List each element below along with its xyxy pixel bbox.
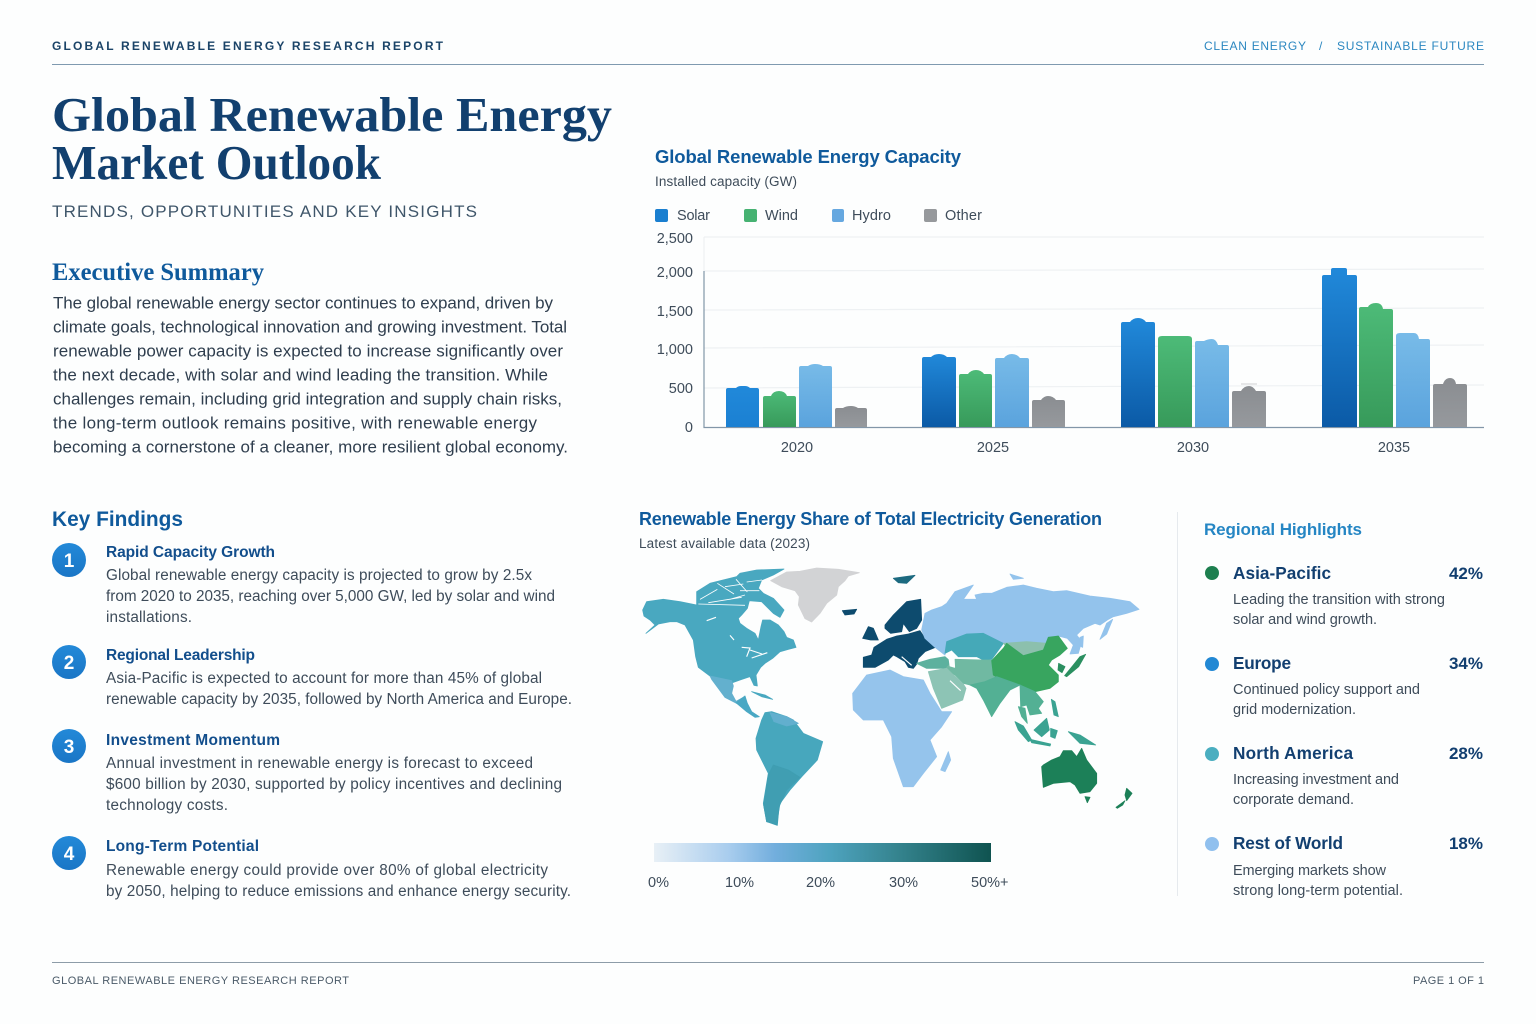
australia and new zealand xyxy=(1042,748,1132,808)
footer: GLOBAL RENEWABLE ENERGY RESEARCH REPORT xyxy=(52,975,349,987)
header bar xyxy=(52,39,1484,65)
finding 3: $600 billion by 2030, supported by policy incentives and declining xyxy=(106,776,562,793)
region: rest of world: Rest of World xyxy=(1233,833,1343,853)
finding 1: 1 xyxy=(64,551,75,572)
y axis labels: 2,000 xyxy=(657,265,693,281)
x axis labels xyxy=(781,440,1410,456)
china xyxy=(992,636,1067,692)
text block: summary body xyxy=(53,294,568,456)
colour scale legend: 10% xyxy=(725,875,754,891)
title: Global Renewable Energy xyxy=(52,87,612,142)
finding 4: by 2050, helping to reduce emissions and enhance energy security. xyxy=(106,883,571,900)
footer xyxy=(52,962,1484,987)
turkey and caucasus xyxy=(917,657,951,668)
chart legend: Solar xyxy=(677,208,710,224)
x axis labels: 2020 xyxy=(781,440,813,456)
finding 2: 2 xyxy=(64,653,74,674)
north america xyxy=(643,569,796,699)
header bar: SUSTAINABLE FUTURE xyxy=(1337,39,1484,53)
text block: summary body: the next decade, with solar and wind leading the transition. While xyxy=(53,366,548,384)
x axis labels: 2025 xyxy=(977,440,1009,456)
bars 2035 xyxy=(1322,268,1467,427)
heading: capacity chart: Global Renewable Energy Capacity xyxy=(655,146,962,167)
panel: capacity chart xyxy=(655,146,1484,456)
x axis labels: 2035 xyxy=(1378,440,1410,456)
chart legend: Wind xyxy=(765,208,798,224)
india and south east asia xyxy=(970,677,1043,723)
title xyxy=(52,87,612,190)
text block: summary body: becoming a cornerstone of a cleaner, more resilient global economy. xyxy=(53,438,568,456)
finding 3 xyxy=(52,729,562,814)
text block: summary body: climate goals, technological innovation and growing investment. Total xyxy=(53,318,567,336)
water details xyxy=(707,617,961,691)
finding 3: Investment Momentum xyxy=(106,732,280,749)
region: asia-pacific xyxy=(1205,563,1483,628)
finding 4: 4 xyxy=(64,844,75,865)
africa xyxy=(853,670,952,787)
y axis labels xyxy=(657,231,693,436)
region: europe: Continued policy support and xyxy=(1233,682,1420,698)
finding 4 xyxy=(52,836,571,900)
region: rest of world xyxy=(1205,833,1483,899)
header bar: GLOBAL RENEWABLE ENERGY RESEARCH REPORT xyxy=(52,39,444,53)
europe xyxy=(842,599,935,668)
header bar: CLEAN ENERGY xyxy=(1204,39,1306,53)
panel: regional highlights xyxy=(1204,520,1483,899)
y axis labels: 0 xyxy=(685,420,693,436)
finding 1: from 2020 to 2035, reaching over 5,000 GW, led by solar and wind xyxy=(106,588,555,605)
region: asia-pacific: solar and wind growth. xyxy=(1233,612,1377,628)
region: rest of world: strong long-term potential. xyxy=(1233,883,1403,899)
region: rest of world: 18% xyxy=(1449,834,1483,853)
finding 1: Global renewable energy capacity is projected to grow by 2.5x xyxy=(106,567,532,584)
finding 2: Asia-Pacific is expected to account for more than 45% of global xyxy=(106,670,542,687)
heading: map: Renewable Energy Share of Total Electricity Generation xyxy=(639,509,1102,529)
panel: executive summary xyxy=(52,259,568,456)
region: rest of world: Emerging markets show xyxy=(1233,863,1387,879)
subtitle: TRENDS, OPPORTUNITIES AND KEY INSIGHTS xyxy=(52,202,477,221)
iran and central south asia xyxy=(947,659,997,685)
finding 1: installations. xyxy=(106,609,192,626)
finding 1: Rapid Capacity Growth xyxy=(106,544,275,561)
region: europe: Europe xyxy=(1233,653,1291,673)
text block: summary body: renewable power capacity is expected to increase significantly over xyxy=(53,342,563,360)
region: asia-pacific: Asia-Pacific xyxy=(1233,563,1331,583)
panel: key findings xyxy=(52,507,572,900)
heading: key findings: Key Findings xyxy=(52,507,183,531)
heading: executive summary: Executive Summary xyxy=(52,259,264,286)
colour scale legend: 30% xyxy=(889,875,918,891)
finding 3: technology costs. xyxy=(106,797,228,814)
mongolia xyxy=(1003,642,1047,657)
russia xyxy=(922,574,1139,655)
region: north america: Increasing investment and xyxy=(1233,772,1399,788)
finding 2: renewable capacity by 2035, followed by North America and Europe. xyxy=(106,691,572,708)
region: asia-pacific: 42% xyxy=(1449,564,1483,583)
region: north america: 28% xyxy=(1449,744,1483,763)
world map xyxy=(643,568,1139,825)
text block: summary body: challenges remain, including grid integration and supply chain risks, xyxy=(53,390,562,408)
mexico and central america xyxy=(710,676,743,706)
colour scale legend xyxy=(648,843,1008,891)
region: north america: North America xyxy=(1233,743,1353,763)
chart subtitle: Installed capacity (GW) xyxy=(655,174,797,189)
title: Market Outlook xyxy=(52,135,382,190)
finding 3: 3 xyxy=(64,737,74,758)
y axis labels: 1,000 xyxy=(657,342,693,358)
finding 1 xyxy=(52,543,555,626)
bars 2025 xyxy=(922,354,1065,427)
bars 2020 xyxy=(726,364,867,427)
x axis labels: 2030 xyxy=(1177,440,1209,456)
text block: summary body: The global renewable energy sector continues to expand, driven by xyxy=(53,294,554,312)
central asia xyxy=(945,633,1003,660)
greenland xyxy=(771,568,859,622)
middle east xyxy=(928,668,966,708)
region: asia-pacific: Leading the transition with strong xyxy=(1233,592,1445,608)
text block: summary body: the long-term outlook remains positive, with renewable energy xyxy=(53,414,538,432)
header bar: / xyxy=(1319,39,1323,53)
indonesia and pacific islands xyxy=(1015,699,1096,746)
finding 3: Annual investment in renewable energy is forecast to exceed xyxy=(106,755,533,772)
footer: PAGE 1 OF 1 xyxy=(1413,975,1484,987)
arctic channels xyxy=(698,579,762,605)
finding 4: Renewable energy could provide over 80% of global electricity xyxy=(106,862,548,879)
region: europe: 34% xyxy=(1449,654,1483,673)
region: europe: grid modernization. xyxy=(1233,702,1356,718)
region: europe xyxy=(1205,653,1483,718)
heading: regional highlights: Regional Highlights xyxy=(1204,520,1362,539)
colour scale legend: 0% xyxy=(648,875,669,891)
y axis labels: 2,500 xyxy=(657,231,693,247)
japan and korea xyxy=(1058,654,1086,677)
bars 2030 xyxy=(1121,318,1266,427)
colour scale legend: 20% xyxy=(806,875,835,891)
colour scale legend: 50%+ xyxy=(971,875,1008,891)
chart legend: Hydro xyxy=(852,208,891,224)
region: north america: corporate demand. xyxy=(1233,792,1354,808)
map subtitle: Latest available data (2023) xyxy=(639,536,810,551)
chart legend: Other xyxy=(945,208,982,224)
finding 2 xyxy=(52,645,572,708)
chart legend xyxy=(655,208,982,224)
south america xyxy=(756,712,823,824)
region: north america xyxy=(1205,743,1483,808)
y axis labels: 1,500 xyxy=(657,304,693,320)
y axis labels: 500 xyxy=(669,381,693,397)
panel: world map section xyxy=(639,509,1139,891)
finding 2: Regional Leadership xyxy=(106,647,255,664)
finding 4: Long-Term Potential xyxy=(106,838,259,855)
